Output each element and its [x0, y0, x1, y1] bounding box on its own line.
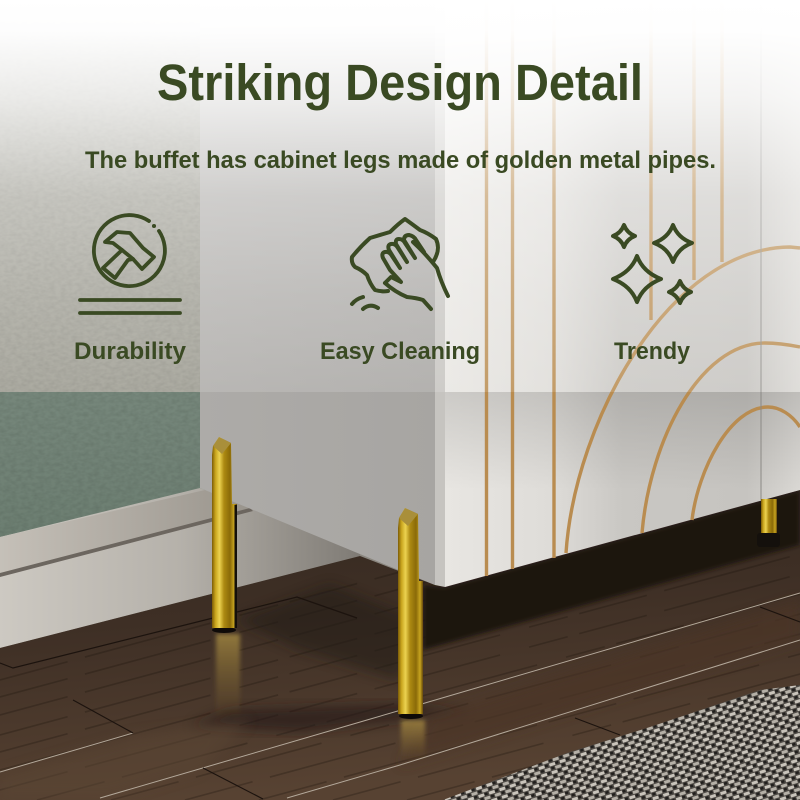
front gold leg: [398, 508, 425, 760]
icon: four sparkles: [613, 225, 692, 303]
subtitle: The buffet has cabinet legs made of golden metal pipes.: [85, 147, 716, 174]
icon: hammer in circle with lines: [80, 215, 180, 313]
wood floor: [0, 464, 800, 800]
door seam: [760, 0, 762, 500]
feature: easy cleaning: [320, 219, 480, 365]
title: Striking Design Detail: [157, 54, 643, 111]
veil over upper image: [0, 0, 800, 392]
back right leg: [757, 499, 780, 547]
label: Easy Cleaning: Easy Cleaning: [320, 338, 480, 365]
label: Trendy: Trendy: [614, 338, 691, 365]
baseboard: [0, 488, 360, 648]
gold inlay lines: [486, 0, 800, 576]
woven rug: [443, 685, 800, 800]
left rear gold leg: [212, 437, 240, 719]
cabinet front: [435, 0, 800, 587]
feature: trendy: [613, 225, 692, 365]
label: Durability: Durability: [74, 338, 187, 365]
icon: hand wiping with cloth: [352, 219, 448, 309]
feature: durability: [74, 215, 187, 365]
wall: [0, 0, 210, 562]
cabinet side: [200, 0, 435, 585]
